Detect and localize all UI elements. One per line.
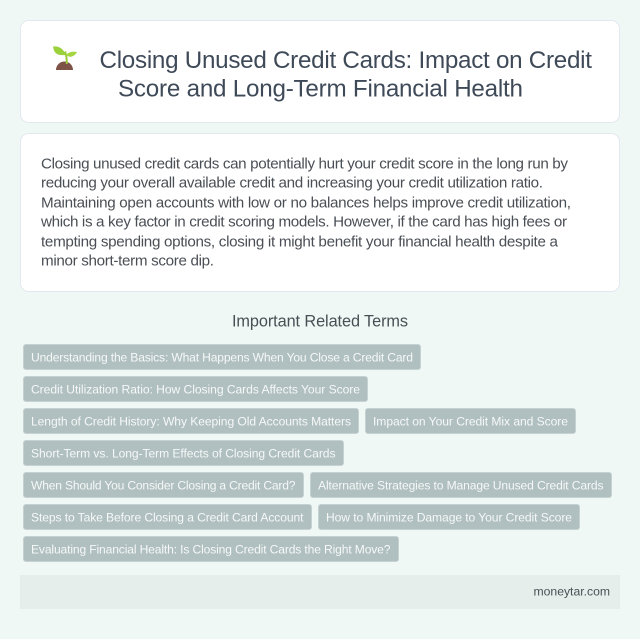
tag	[24, 408, 358, 434]
text block: summary	[40, 156, 571, 270]
footer source text: moneytar.com	[534, 584, 610, 598]
tag	[24, 440, 344, 466]
tag	[24, 504, 312, 530]
tag: Evaluating Financial Health: Is Closing Credit Cards the Right Move?	[31, 542, 391, 556]
title: Score and Long-Term Financial Health	[118, 76, 523, 102]
text block: summary: minor short-term score dip.	[41, 252, 214, 270]
tag	[310, 472, 612, 498]
title	[100, 47, 592, 102]
text block: summary: Closing unused credit cards can potentially hurt your credit score in the long run by	[41, 156, 568, 172]
panel: header	[20, 20, 620, 122]
tag: Understanding the Basics: What Happens When You Close a Credit Card	[31, 350, 413, 364]
text block: summary: tempting spending options, closing it might benefit your financial health despite a	[41, 234, 559, 250]
tag	[24, 536, 398, 562]
tag: Steps to Take Before Closing a Credit Card Account	[31, 510, 304, 524]
tag: How to Minimize Damage to Your Credit Score	[326, 510, 572, 524]
tag: Credit Utilization Ratio: How Closing Cards Affects Your Score	[31, 382, 360, 396]
tag: Alternative Strategies to Manage Unused Credit Cards	[318, 478, 604, 492]
footer	[20, 575, 620, 609]
icon: seedling	[53, 46, 77, 70]
tag: When Should You Consider Closing a Credit Card?	[31, 478, 296, 492]
text block: summary: reducing your overall available credit and increasing your credit utilization ratio.	[41, 174, 543, 192]
title: Closing Unused Credit Cards: Impact on Credit	[100, 47, 592, 74]
tag	[24, 376, 368, 402]
heading: important related terms: Important Related Terms	[232, 312, 408, 330]
panel: summary text	[20, 134, 620, 292]
tag: Impact on Your Credit Mix and Score	[373, 414, 568, 428]
tag: Short-Term vs. Long-Term Effects of Closing Credit Cards	[31, 446, 336, 460]
tag	[366, 408, 576, 434]
tag	[24, 344, 420, 370]
tag	[24, 472, 304, 498]
tag: Length of Credit History: Why Keeping Old Accounts Matters	[31, 414, 351, 428]
text block: summary: which is a key factor in credit scoring models. However, if the card has high fees or	[40, 214, 567, 230]
tag list	[24, 344, 612, 562]
text block: summary: Maintaining open accounts with low or no balances helps improve credit utilization,	[41, 194, 571, 212]
tag	[318, 504, 580, 530]
